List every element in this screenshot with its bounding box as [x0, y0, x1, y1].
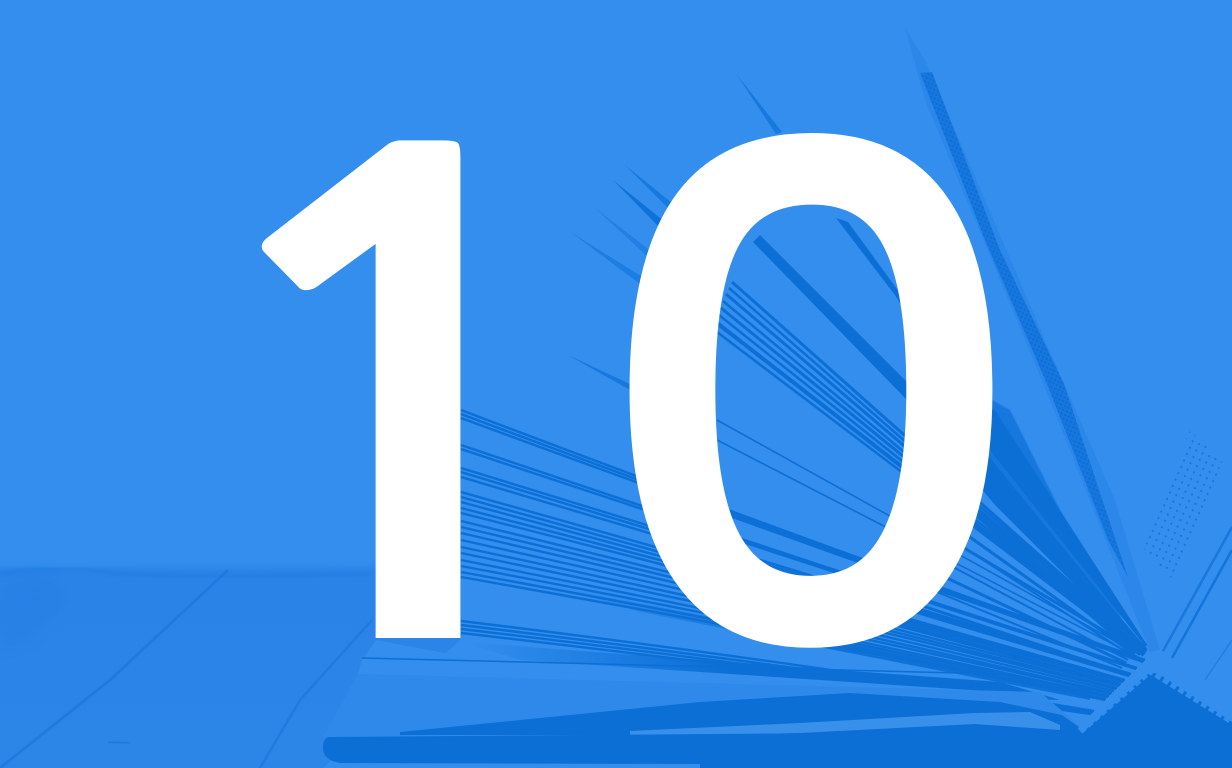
wooden table	[0, 562, 460, 768]
shaded page band	[985, 400, 1130, 640]
book cover	[323, 673, 1232, 768]
dotted page edge stripe	[920, 72, 1128, 577]
tall standing page	[905, 28, 1160, 652]
open book	[323, 28, 1232, 768]
lower page wedges	[560, 588, 1090, 700]
page text dots	[1143, 430, 1222, 582]
spine stitching	[1080, 671, 1232, 731]
right page fan	[1163, 527, 1232, 680]
upper fan of page edges	[568, 75, 1148, 650]
big number 10	[262, 133, 992, 648]
digit 0: 0	[613, 1, 1009, 768]
left fan of page edges	[461, 410, 1145, 714]
digit 1: 1	[160, 86, 640, 746]
fine page lines upper fan	[717, 282, 1146, 672]
